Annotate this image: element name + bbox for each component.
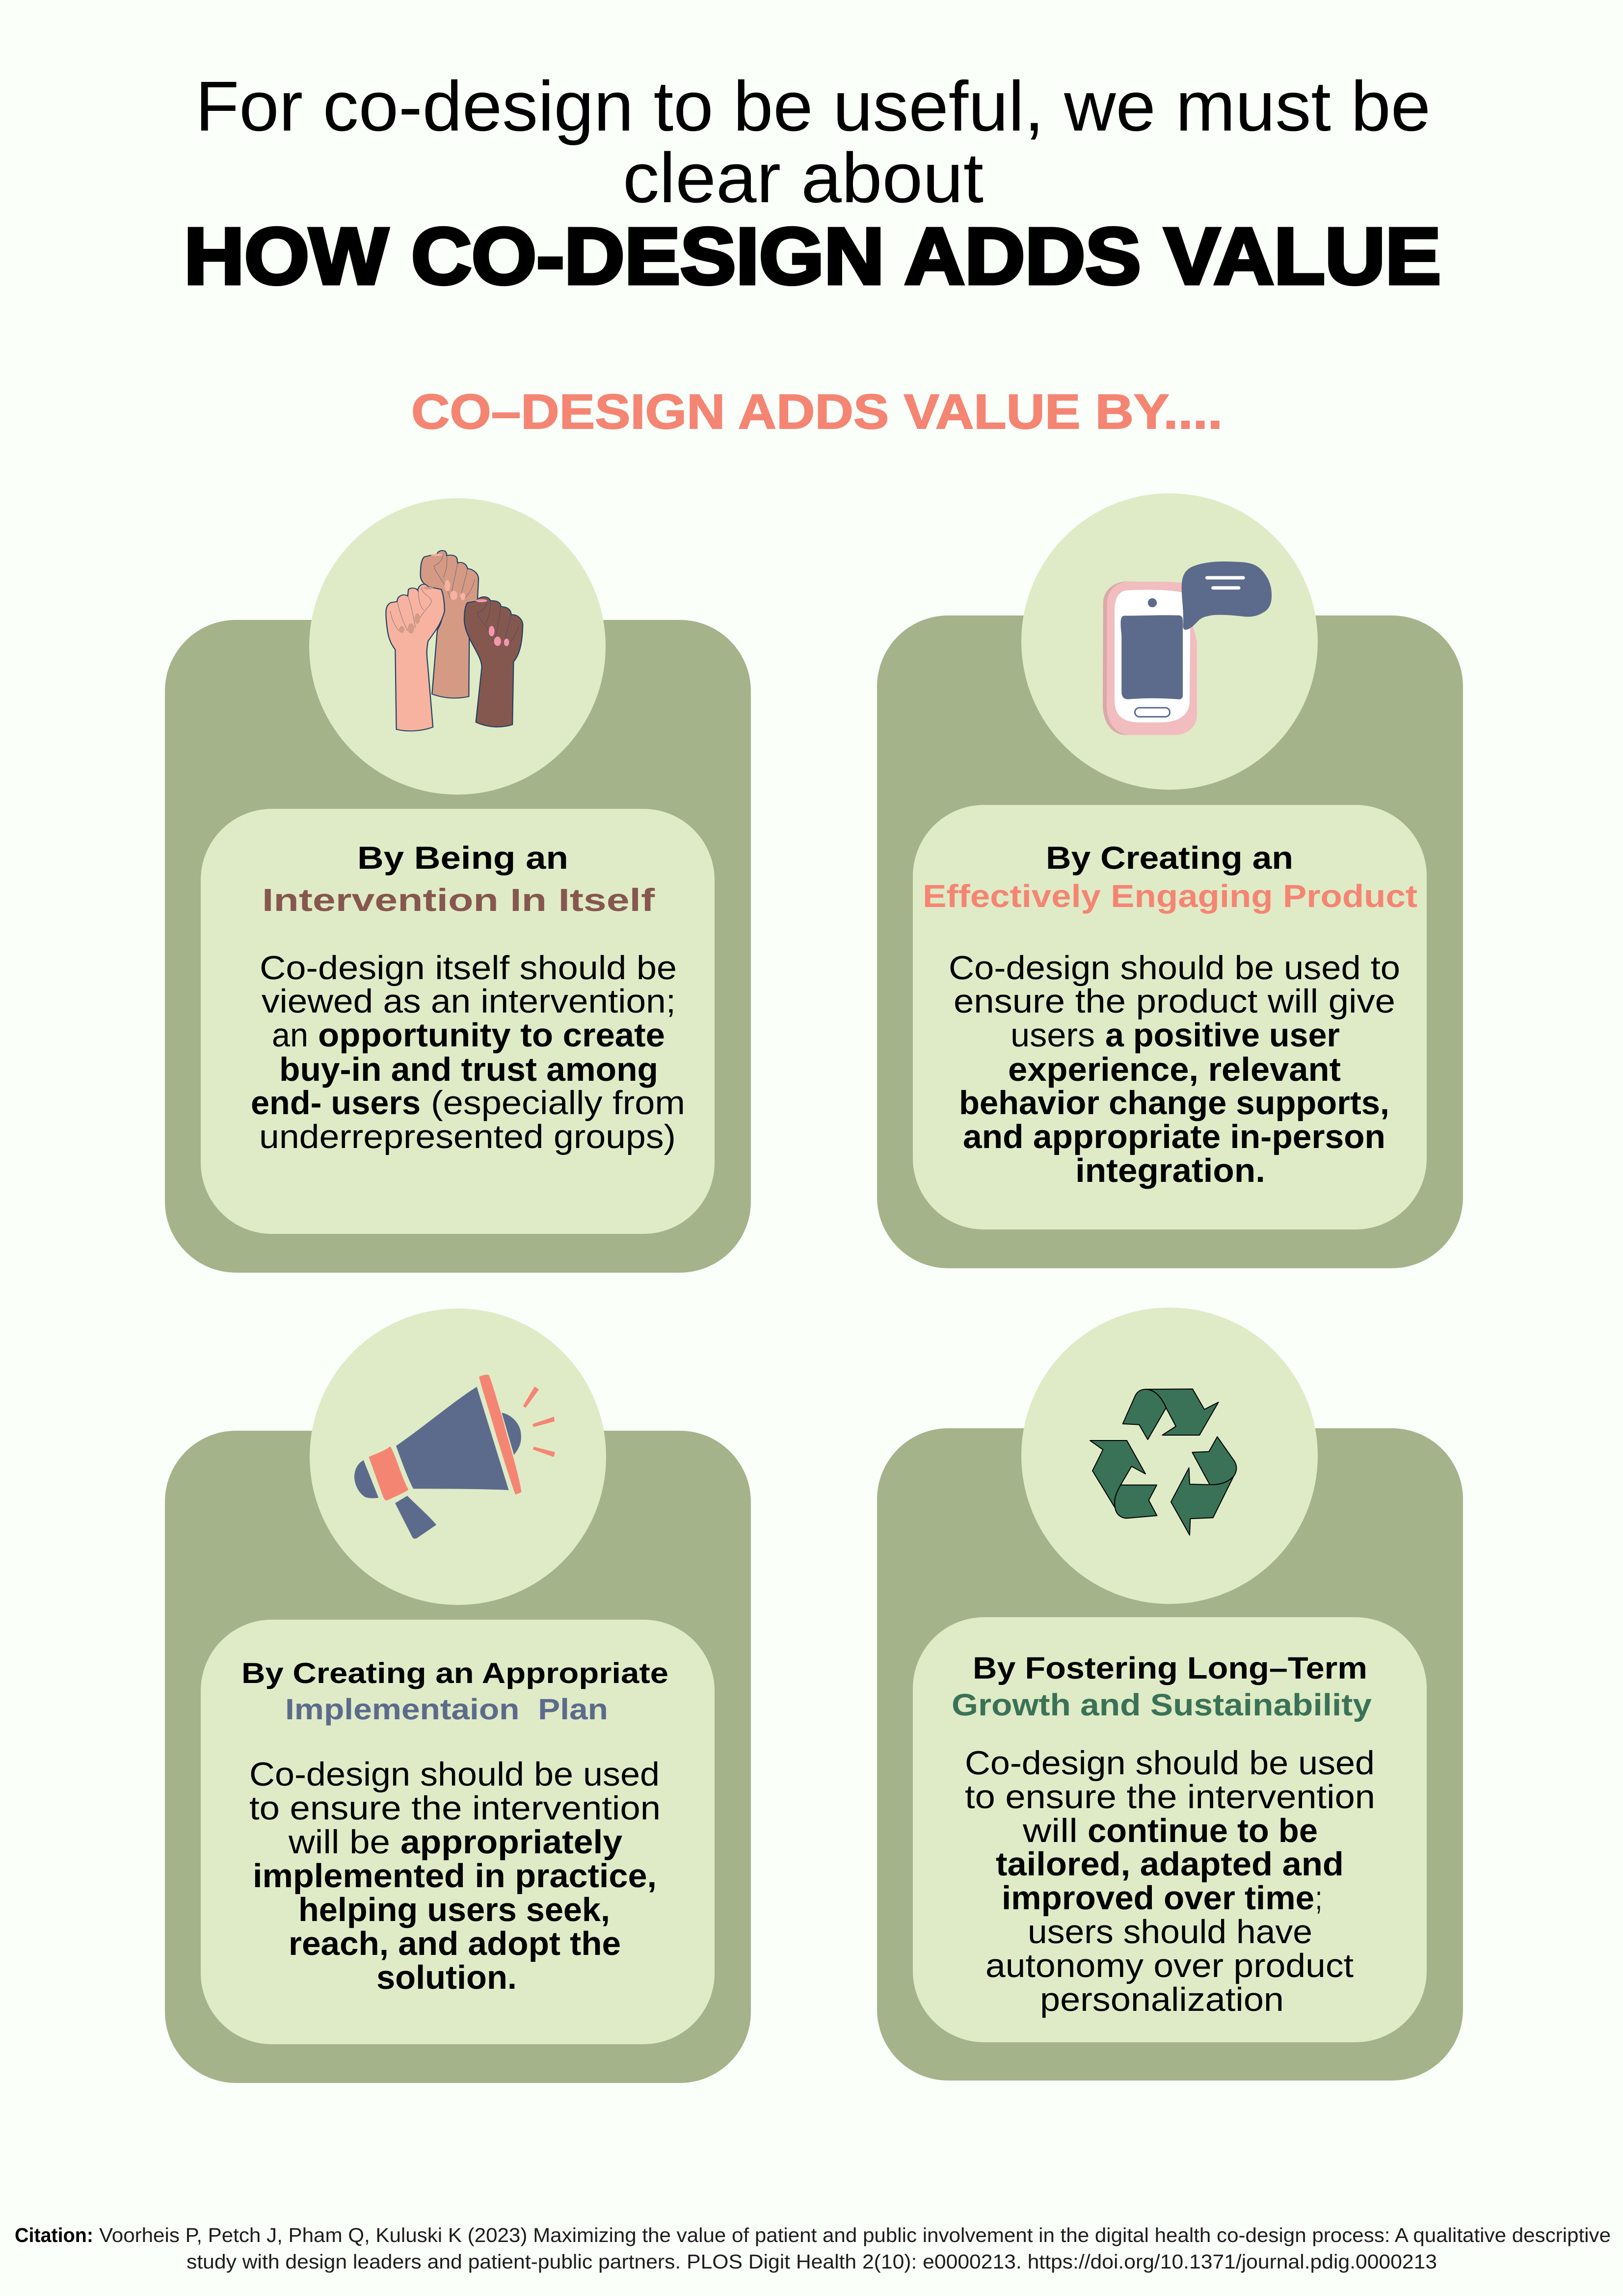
citation: [15, 2224, 1611, 2273]
panel body text: Co-design itself should be: [260, 949, 677, 987]
panel heading: [923, 840, 1417, 914]
panel body text: will be: [288, 1823, 390, 1861]
title: HOW CO-DESIGN ADDS VALUE: [184, 211, 1441, 301]
panel body text: solution.: [376, 1959, 517, 1996]
citation: study with design leaders and patient-public partners. PLOS Digit Health 2(10): e0000213. https://doi.org/10.1371/journal.pdig.0000213: [186, 2250, 1437, 2273]
panel body text: viewed as an intervention;: [262, 983, 676, 1020]
icon circle: [309, 498, 606, 795]
panel: implementation plan: [165, 1308, 751, 2083]
panel heading: By Being an: [357, 840, 568, 876]
panel background: [165, 620, 751, 1273]
panel heading: [241, 1657, 668, 1726]
panel body text: continue to be: [1088, 1812, 1318, 1849]
panel body text: Co-design should be used to: [949, 949, 1400, 987]
panel body text: and appropriate in-person: [963, 1118, 1385, 1155]
icon circle: [310, 1308, 606, 1605]
panel body text: appropriately: [400, 1823, 622, 1861]
title: For co-design to be useful, we must be: [195, 67, 1431, 146]
panel body text: integration.: [1075, 1152, 1265, 1189]
panel body text: experience, relevant: [1008, 1051, 1341, 1088]
panel heading: Implementaion Plan: [285, 1693, 608, 1726]
citation: Citation:: [15, 2224, 93, 2246]
panel: growth and sustainability: [877, 1308, 1463, 2081]
panel body text: autonomy over product: [985, 1947, 1354, 1984]
panel background: [877, 615, 1463, 1268]
panel heading: Intervention In Itself: [262, 882, 655, 918]
subheading: CO–DESIGN ADDS VALUE BY....: [411, 384, 1223, 439]
panel heading: [952, 1651, 1372, 1722]
panel heading: Growth and Sustainability: [952, 1688, 1372, 1722]
panel body text: improved over time: [1002, 1879, 1314, 1917]
panel background: [165, 1431, 751, 2083]
panel background: [877, 1428, 1463, 2081]
panel body text: underrepresented groups): [259, 1118, 676, 1155]
inner text card: [201, 1620, 715, 2044]
panel body text: users: [1011, 1016, 1095, 1054]
inner text card: [913, 805, 1427, 1229]
panel heading: By Creating an Appropriate: [241, 1657, 668, 1689]
panel body text: helping users seek,: [298, 1891, 610, 1928]
panel body text: a positive user: [1105, 1016, 1340, 1054]
panel body text: tailored, adapted and: [996, 1845, 1344, 1883]
icon circle: [1021, 493, 1318, 790]
panel body text: opportunity to create: [318, 1016, 665, 1054]
panel body text: [949, 949, 1400, 1189]
inner text card: [913, 1617, 1427, 2042]
panel body text: personalization: [1040, 1981, 1284, 2018]
panel body text: implemented in practice,: [253, 1857, 657, 1895]
panel body text: ensure the product will give: [954, 983, 1395, 1020]
panel body text: will: [1022, 1812, 1078, 1849]
panel body text: [965, 1744, 1375, 2018]
inner text card: [201, 809, 715, 1234]
panel body text: [249, 1756, 661, 1996]
panel body text: ;: [1315, 1879, 1322, 1917]
panel: intervention in itself: [165, 498, 751, 1273]
panel body text: users should have: [1028, 1913, 1312, 1950]
panel body text: to ensure the intervention: [249, 1789, 661, 1827]
panel heading: [262, 840, 655, 918]
icon: phone with speech bubble: [1103, 561, 1272, 735]
panel body text: buy-in and trust among: [279, 1051, 658, 1088]
icon: megaphone: [354, 1375, 555, 1539]
panel: effectively engaging product: [877, 493, 1463, 1268]
icon circle: [1021, 1308, 1318, 1604]
panel body text: to ensure the intervention: [965, 1778, 1375, 1815]
panel body text: Co-design should be used: [249, 1756, 660, 1793]
panel body text: (especially from: [431, 1084, 685, 1121]
panel body text: reach, and adopt the: [289, 1925, 621, 1962]
citation: Voorheis P, Petch J, Pham Q, Kuluski K (2023) Maximizing the value of patient and public involvement in the digital health co-design process: A qualitative descriptive: [99, 2224, 1611, 2246]
panel body text: [251, 949, 685, 1155]
title: [184, 67, 1441, 301]
panel heading: By Creating an: [1046, 840, 1293, 876]
panel body text: behavior change supports,: [959, 1084, 1389, 1121]
icon: raised fists: [386, 551, 523, 731]
title: clear about: [623, 138, 984, 217]
panel body text: Co-design should be used: [965, 1744, 1375, 1782]
panel body text: an: [272, 1016, 308, 1054]
icon: recycling arrows: [1090, 1389, 1236, 1535]
panel heading: Effectively Engaging Product: [923, 878, 1417, 914]
panel heading: By Fostering Long–Term: [973, 1651, 1367, 1685]
panel body text: end- users: [251, 1084, 421, 1121]
